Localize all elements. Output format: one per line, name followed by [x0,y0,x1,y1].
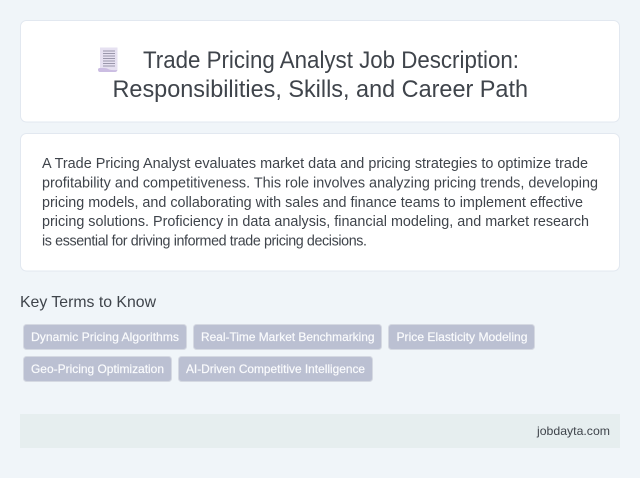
chip: geo-pricing optimization: Geo-Pricing Optimization [31,362,164,376]
chip: real-time market benchmarking: Real-Time Market Benchmarking [201,330,374,344]
chip: real-time market benchmarking [194,324,382,350]
title: Trade Pricing Analyst Job Description: [143,47,519,74]
text block: job description: pricing solutions. Proficiency in data analysis, financial modeling, and market research [42,214,589,230]
heading: key terms: Key Terms to Know [20,294,156,311]
text block: job description: pricing models, and collaborating with sales and finance teams to implement effective [42,195,583,211]
chip: dynamic pricing algorithms [24,324,186,350]
chip: dynamic pricing algorithms: Dynamic Pricing Algorithms [31,330,179,344]
panel: title card [20,20,620,122]
icon: receipt document [98,48,118,72]
chip: ai-driven competitive intelligence [178,356,372,382]
chip: geo-pricing optimization [24,356,172,382]
title [112,47,528,103]
title: Responsibilities, Skills, and Career Path [112,76,528,103]
panel: description card [20,134,620,271]
footer bar [20,414,620,448]
text block: job description: is essential for driving informed trade pricing decisions. [42,234,367,250]
chip: ai-driven competitive intelligence: AI-Driven Competitive Intelligence [186,362,365,376]
text block: job description [42,156,598,250]
footer source text: jobdayta.com [536,424,610,438]
chip: price elasticity modeling: Price Elasticity Modeling [396,330,528,344]
text block: job description: profitability and competitiveness. This role involves analyzing pricing trends, developing [42,176,598,192]
text block: job description: A Trade Pricing Analyst evaluates market data and pricing strategies to optimize trade [42,156,588,172]
panel: key term chips [24,324,534,382]
chip: price elasticity modeling [388,324,534,350]
